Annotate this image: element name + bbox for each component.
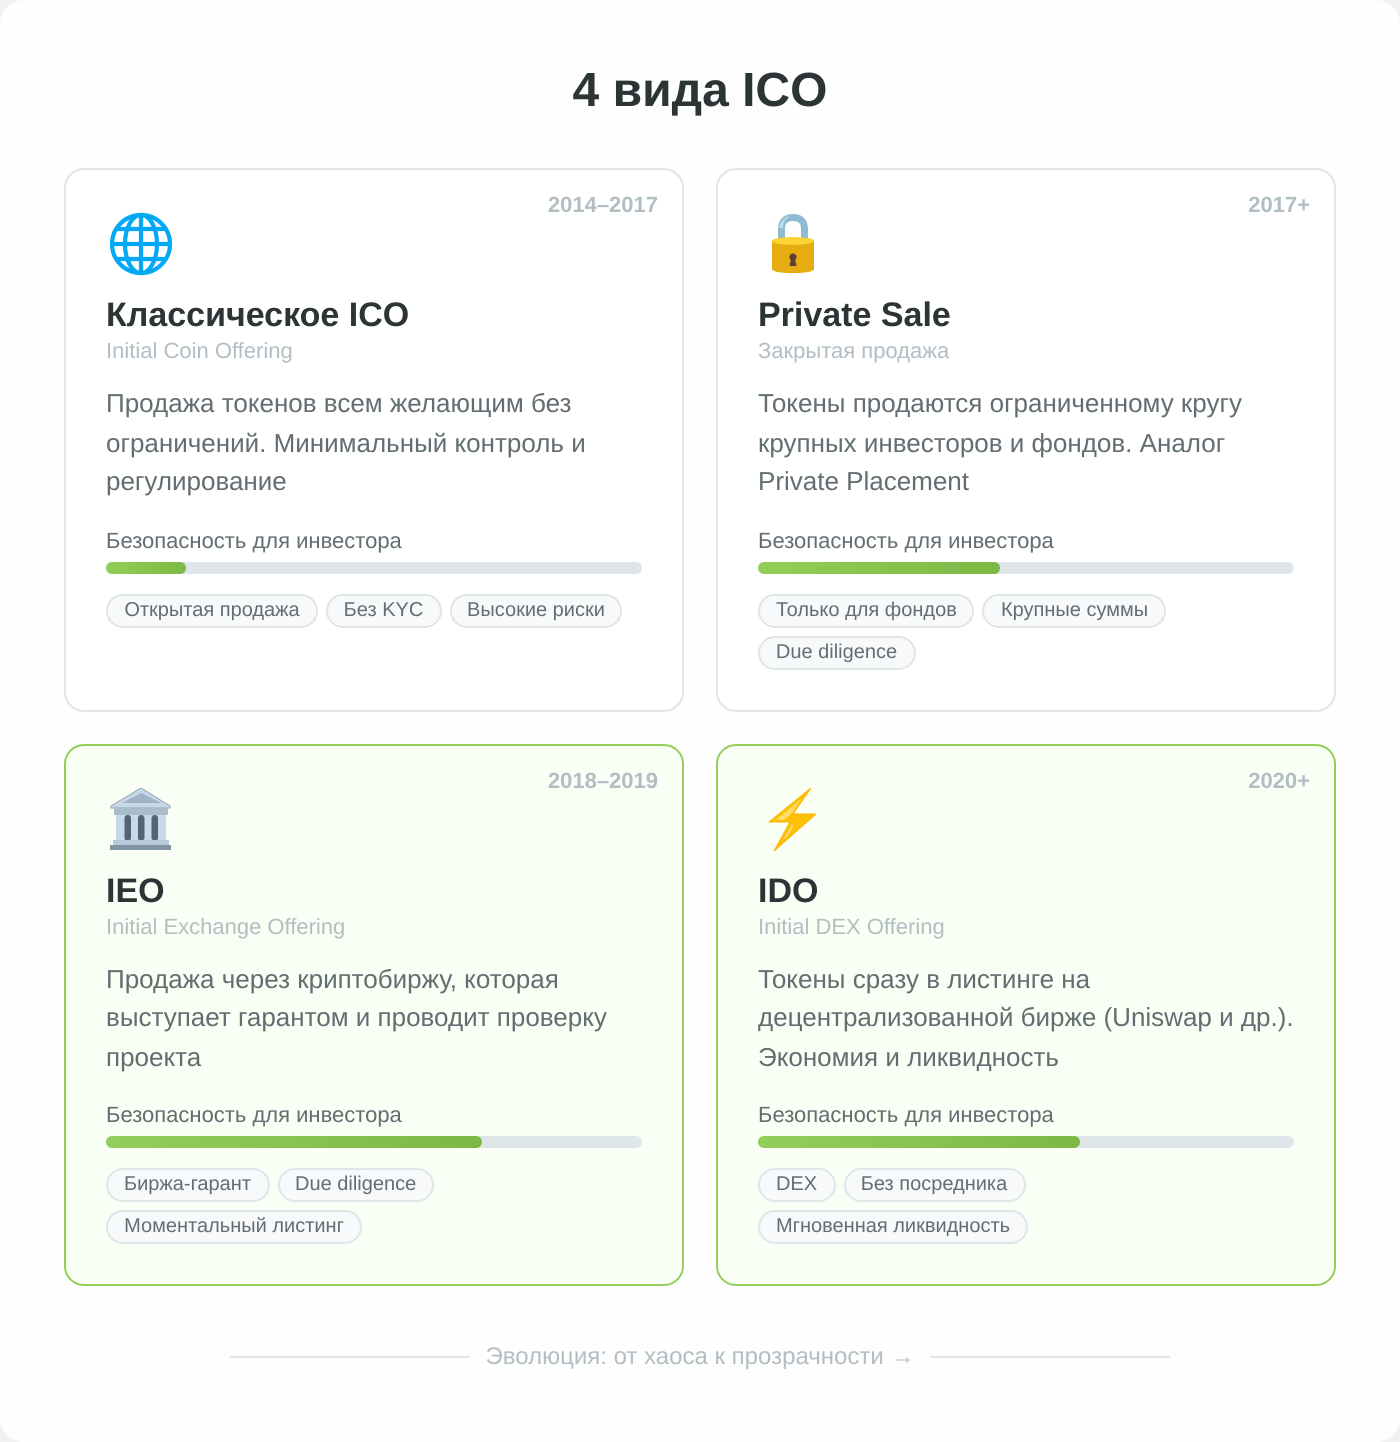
card subtitle: Initial DEX Offering — [758, 914, 945, 939]
tag — [844, 1168, 1026, 1202]
period: classic ICO: 2014–2017 — [548, 192, 658, 217]
safety bar: 60% — [758, 1136, 1294, 1148]
card subtitle: Закрытая продажа — [758, 338, 949, 363]
tag: Моментальный листинг — [124, 1215, 344, 1237]
tag: Без посредника — [861, 1173, 1007, 1195]
safety label: Безопасность для инвестора — [106, 528, 402, 553]
tag — [326, 594, 442, 628]
period: IEO: 2018–2019 — [548, 768, 658, 793]
tag: Открытая продажа — [124, 599, 300, 621]
card title: Классическое ICO — [106, 296, 409, 334]
description — [106, 388, 586, 496]
safety bar: 15% — [106, 562, 642, 574]
period: IDO: 2020+ — [1248, 768, 1310, 793]
safety bar: 70% — [106, 1136, 642, 1148]
tag: Крупные суммы — [1001, 599, 1148, 621]
tag: Биржа-гарант — [124, 1173, 251, 1195]
safety label: Безопасность для инвестора — [758, 528, 1054, 553]
tag: Due diligence — [776, 641, 897, 663]
tag — [758, 636, 916, 670]
description: ограничений. Минимальный контроль и — [106, 428, 586, 458]
tag — [982, 594, 1166, 628]
description: крупных инвесторов и фондов. Аналог — [758, 428, 1225, 458]
description: Экономия и ликвидность — [758, 1042, 1059, 1072]
panel: classic ICO — [64, 168, 684, 712]
panel: IEO — [64, 744, 684, 1286]
description: выступает гарантом и проводит проверку — [106, 1002, 607, 1032]
tag: Due diligence — [295, 1173, 416, 1195]
tag: Только для фондов — [776, 599, 957, 621]
tag — [278, 1168, 434, 1202]
description: Продажа токенов всем желающим без — [106, 388, 571, 418]
icon: padlock — [772, 214, 814, 274]
title: 4 вида ICO — [573, 64, 827, 117]
description: Токены продаются ограниченному кругу — [758, 388, 1242, 418]
tag: Мгновенная ликвидность — [776, 1215, 1010, 1237]
tag — [106, 594, 318, 628]
footer caption: Эволюция: от хаоса к прозрачности → — [486, 1343, 914, 1370]
tag — [106, 1210, 362, 1244]
description — [758, 388, 1242, 496]
panel: IDO — [716, 744, 1336, 1286]
description: проекта — [106, 1042, 201, 1072]
card title: IEO — [106, 872, 165, 910]
description: регулирование — [106, 466, 287, 496]
tag — [758, 594, 974, 628]
description: Токены сразу в листинге на — [758, 964, 1090, 994]
tag — [758, 1168, 836, 1202]
card subtitle: Initial Coin Offering — [106, 338, 293, 363]
description: децентрализованной бирже (Uniswap и др.). — [758, 1002, 1294, 1032]
safety label: Безопасность для инвестора — [758, 1102, 1054, 1127]
panel: private sale — [716, 168, 1336, 712]
tag — [106, 1168, 270, 1202]
description — [758, 964, 1294, 1072]
tag: Высокие риски — [467, 599, 605, 621]
tag: DEX — [776, 1173, 817, 1195]
description — [106, 964, 607, 1072]
icon: lightning bolt — [768, 788, 816, 852]
safety label: Безопасность для инвестора — [106, 1102, 402, 1127]
card title: IDO — [758, 872, 818, 910]
safety bar: 45% — [758, 562, 1294, 574]
icon: globe — [110, 212, 172, 276]
icon: bank building — [110, 788, 171, 850]
tag — [758, 1210, 1028, 1244]
period: private sale: 2017+ — [1248, 192, 1310, 217]
tag: Без KYC — [344, 599, 423, 621]
tag — [450, 594, 622, 628]
description: Private Placement — [758, 466, 969, 496]
description: Продажа через криптобиржу, которая — [106, 964, 559, 994]
card title: Private Sale — [758, 296, 951, 334]
card subtitle: Initial Exchange Offering — [106, 914, 345, 939]
